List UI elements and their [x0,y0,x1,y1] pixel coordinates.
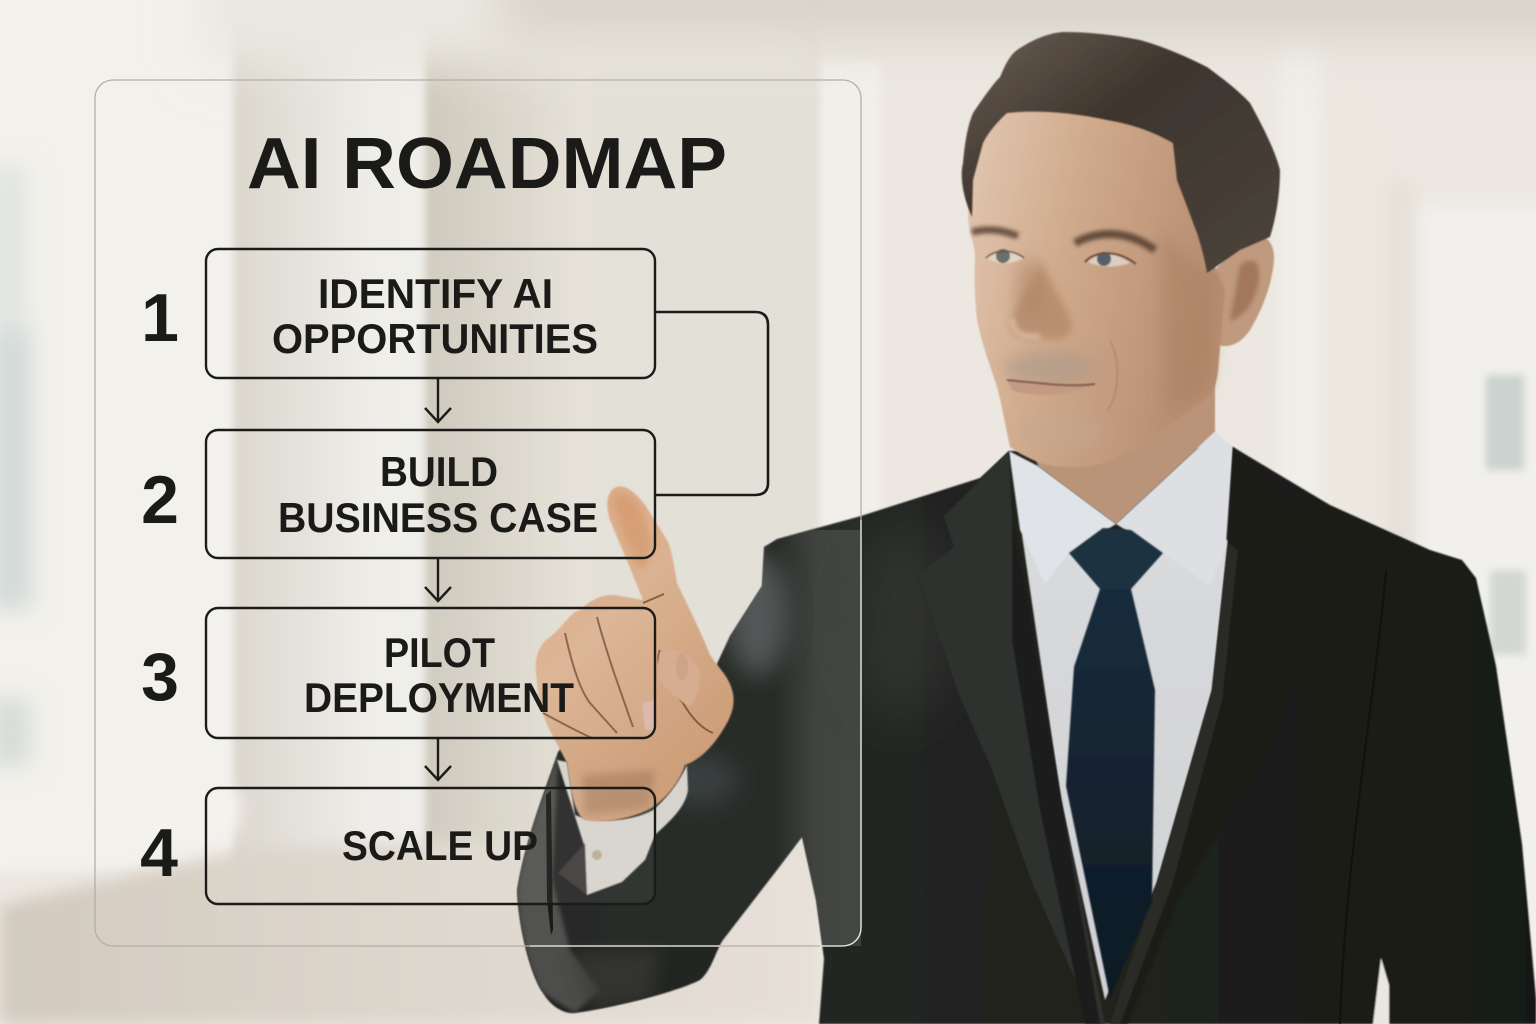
step 1 box: IDENTIFY AI [318,270,553,317]
step 2 box: BUSINESS CASE [278,494,598,541]
neck [1030,340,1215,524]
head: face and ear [968,105,1274,467]
necktie [1066,528,1163,998]
step 3 box: PILOT [384,629,495,676]
step 4 box [206,788,655,904]
step 1 number: 1 [141,280,179,356]
finger creases [543,594,713,738]
title: AI ROADMAP [247,124,727,204]
mouth [1007,340,1117,410]
eyebrows [972,230,1018,236]
step 3 box: DEPLOYMENT [304,674,574,721]
arrow: step 1 to step 2 [425,378,451,422]
step 2 box [206,430,655,558]
step 3 box [206,608,655,738]
step 3 number: 3 [141,639,179,715]
pointing hand [536,486,734,821]
step 1 box [206,249,655,378]
step 2 number: 2 [141,462,179,538]
left and right lapels [918,447,1329,1024]
shirt cuff [557,760,688,895]
suit jacket [517,447,1536,1024]
shirt and collar [1009,432,1233,1000]
arrow: step 2 to step 3 [425,558,451,601]
step 4 number: 4 [140,815,178,891]
suit highlights [517,520,1386,1024]
facial shading [1004,230,1215,446]
step 4 box: SCALE UP [342,822,538,869]
step 1 box: OPPORTUNITIES [272,315,598,362]
eyes [986,249,1136,267]
feedback connector between step 1 and step 2 [655,312,768,495]
hair [962,32,1280,273]
nose [1010,262,1072,340]
step 2 box: BUILD [380,448,498,495]
person: businessman in dark suit [517,32,1536,1024]
arrow: step 3 to step 4 [425,738,451,780]
panel: transparent AI roadmap board [95,80,861,946]
